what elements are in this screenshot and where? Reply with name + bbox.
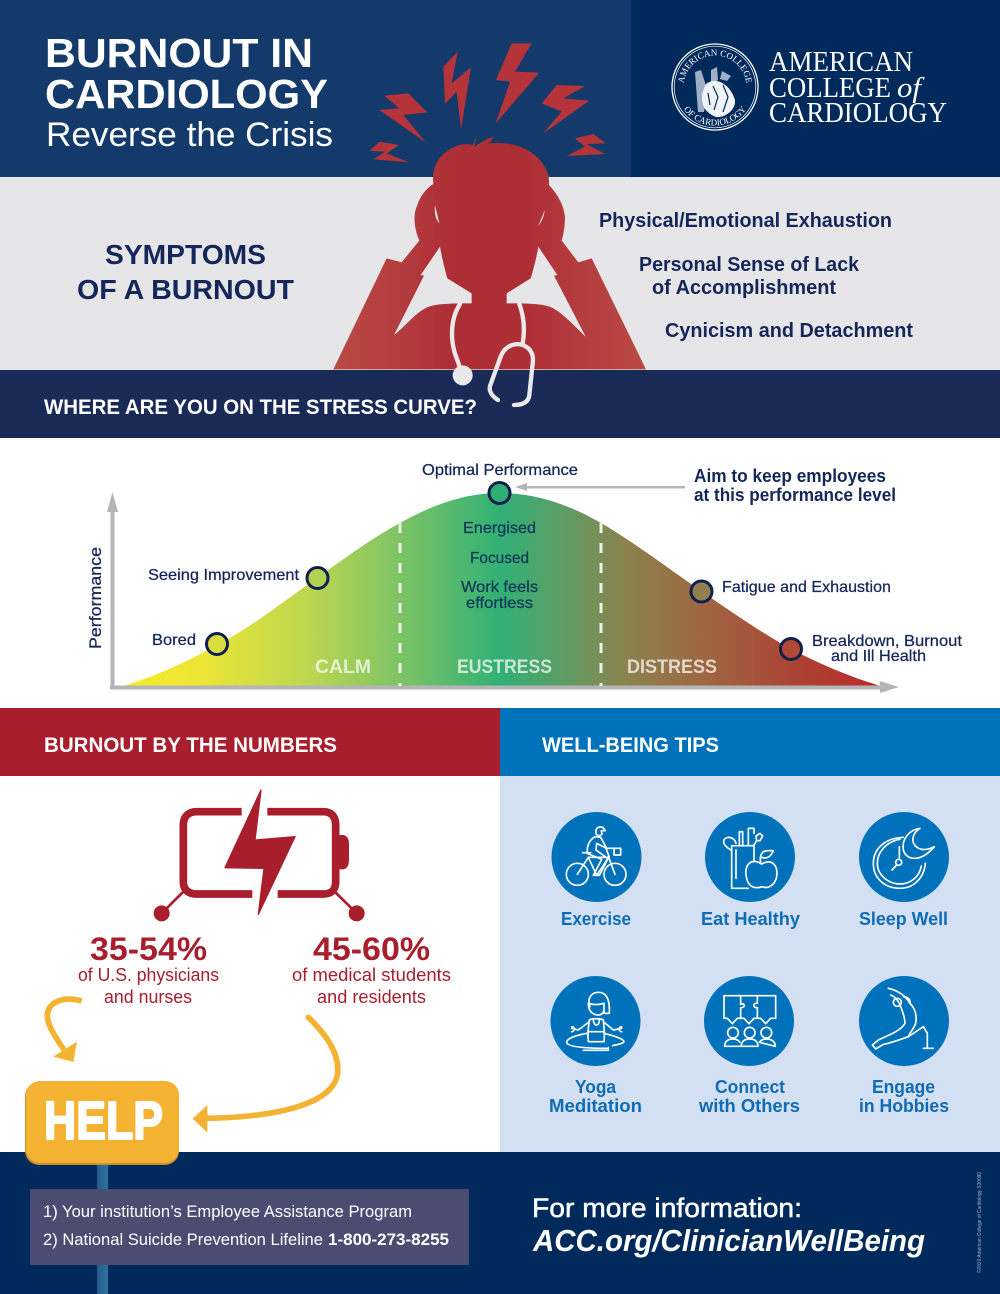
curve labels: Seeing Improvement [148, 567, 300, 584]
hand highlights [435, 205, 545, 226]
silhouette [333, 136, 646, 369]
heading: symptoms of a burnout: OF A BURNOUT [77, 274, 294, 305]
wordmark: of [897, 72, 925, 104]
icon: seal: OF CARDIOLOGY [684, 106, 746, 126]
heading: symptoms of a burnout [77, 239, 294, 305]
zone labels: DISTRESS [627, 656, 717, 678]
copyright: ©2020 American College of Cardiology S30090 [976, 1172, 983, 1273]
symptoms list [599, 209, 913, 342]
tip: connect with others: Connect [715, 1077, 785, 1097]
title: Reverse the Crisis [46, 116, 333, 154]
title: BURNOUT IN [45, 30, 313, 76]
wordmark [769, 46, 947, 129]
more information [532, 1193, 925, 1258]
footer panel [0, 1152, 1000, 1294]
title [45, 30, 333, 154]
curve labels: Fatigue and Exhaustion [722, 579, 891, 596]
arrow: right [193, 1017, 338, 1133]
tip: connect with others: with Others [698, 1096, 800, 1116]
right arm gap [507, 247, 586, 337]
heading: symptoms of a burnout: SYMPTOMS [105, 239, 266, 270]
help sign: HELP [44, 1091, 163, 1151]
tip: yoga meditation [549, 976, 642, 1116]
axes [107, 492, 899, 693]
curve labels: Bored [152, 632, 196, 649]
statistic: physicians and nurses: and nurses [104, 987, 192, 1007]
curve points [206, 482, 802, 660]
tip: yoga meditation: Meditation [549, 1096, 642, 1116]
icon: seal [671, 43, 759, 131]
header panel: logo side [631, 0, 1000, 177]
wordmark: COLLEGE [769, 72, 891, 104]
more information: For more information: [532, 1193, 802, 1223]
icon: yoga lunge [872, 988, 933, 1049]
stress curve heading band [0, 370, 1000, 438]
icon: lightning bolts [369, 43, 606, 162]
help sign [25, 1081, 179, 1165]
help resources box: 1) Your institution’s Employee Assistance Program [43, 1202, 412, 1221]
icon: battery with lightning [154, 790, 365, 921]
panel: burnout numbers heading [0, 708, 500, 776]
help resources box [30, 1189, 469, 1265]
panel: well-being tips heading: WELL-BEING TIPS [542, 734, 719, 757]
curve labels: Optimal Performance [422, 462, 578, 479]
tip: eat healthy: Eat Healthy [701, 909, 800, 929]
statistic: students and residents: and residents [317, 987, 426, 1007]
callout: aim: at this performance level [694, 485, 896, 505]
panel: well-being tips background [500, 776, 1000, 1152]
curve labels [148, 462, 963, 665]
logo: American College of Cardiology [671, 43, 947, 131]
tip: exercise [552, 812, 642, 929]
axis label: Performance [87, 547, 105, 649]
statistic: students and residents: of medical students [292, 965, 451, 985]
eustress traits [461, 520, 538, 612]
stress curve chart [87, 462, 963, 693]
icon: speech puzzle and people [724, 996, 776, 1046]
zone labels [315, 656, 717, 678]
eustress traits: effortless [466, 595, 533, 612]
eustress traits: Energised [463, 520, 536, 537]
left arm gap [394, 247, 472, 335]
arrow: optimal pointer [515, 483, 685, 491]
icon: cyclist [566, 827, 626, 885]
symptoms list: Personal Sense of Lack [639, 253, 860, 276]
arrow: left [47, 999, 82, 1062]
tip: engage in hobbies: Engage [872, 1077, 935, 1097]
tip: exercise: Exercise [561, 909, 631, 929]
tip: sleep well: Sleep Well [859, 909, 948, 929]
sign post [97, 1160, 108, 1294]
tip: connect with others [698, 976, 800, 1116]
zone labels: CALM [315, 656, 371, 678]
zone labels: EUSTRESS [457, 656, 552, 678]
curve labels: Breakdown, Burnout [812, 633, 963, 650]
curve area [120, 493, 884, 687]
tip: engage in hobbies: in Hobbies [859, 1096, 949, 1116]
icon: seal: AMERICAN COLLEGE [678, 50, 752, 84]
icon: clock and moon [873, 828, 934, 888]
statistic: students and residents: 45-60% [313, 931, 430, 967]
statistic: physicians and nurses [78, 931, 219, 1007]
statistic: physicians and nurses: of U.S. physicians [78, 965, 219, 985]
arrows to help sign [47, 999, 338, 1133]
symptoms band [0, 177, 1000, 370]
stethoscope [452, 304, 533, 405]
header panel: title side [0, 0, 631, 177]
panel: well-being tips heading [500, 708, 1000, 776]
help resources box: 2) National Suicide Prevention Lifeline [43, 1230, 323, 1249]
statistic: students and residents [292, 931, 451, 1007]
tip: eat healthy [701, 812, 800, 929]
symptoms list: Physical/Emotional Exhaustion [599, 209, 892, 232]
symptoms list: Cynicism and Detachment [665, 319, 913, 342]
zone dividers [400, 523, 601, 686]
doctor silhouette with stethoscope [333, 136, 646, 405]
wordmark: AMERICAN [769, 46, 913, 78]
icon: meditating figure [567, 992, 624, 1050]
symptoms list: of Accomplishment [652, 276, 836, 299]
tip: engage in hobbies [859, 976, 949, 1116]
curve labels: and Ill Health [831, 648, 926, 665]
wordmark: CARDIOLOGY [769, 97, 947, 129]
tip: yoga meditation: Yoga [575, 1077, 617, 1097]
tip: sleep well [859, 812, 949, 929]
eustress traits: Work feels [461, 579, 538, 596]
heading: stress curve: WHERE ARE YOU ON THE STRESS CURVE? [44, 396, 477, 419]
panel: burnout numbers heading: BURNOUT BY THE NUMBERS [44, 734, 337, 757]
statistic: physicians and nurses: 35-54% [90, 931, 207, 967]
callout: aim [694, 466, 896, 505]
icon: juice and apple [724, 828, 777, 888]
callout: aim: Aim to keep employees [694, 466, 886, 486]
title: CARDIOLOGY [45, 71, 328, 117]
help resources box: 1-800-273-8255 [328, 1230, 449, 1249]
eustress traits: Focused [470, 550, 529, 567]
more information: ACC.org/ClinicianWellBeing [532, 1223, 925, 1258]
